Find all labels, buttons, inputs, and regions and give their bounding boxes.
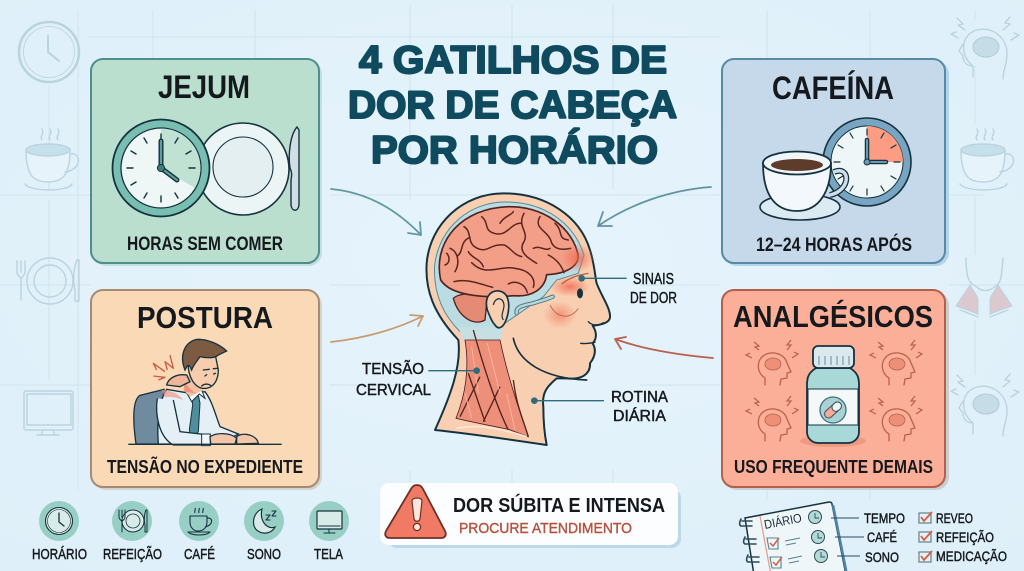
panel: postura <box>91 290 322 490</box>
diary clock hands <box>815 513 825 557</box>
neck fluid layer <box>458 327 503 342</box>
icon: medicine bottle <box>800 346 866 447</box>
notebook: diario <box>740 502 864 571</box>
label: sinais de dor: DE DOR <box>630 290 677 307</box>
icon: tela <box>309 501 349 541</box>
caption: cafeina: 12–24 HORAS APÓS <box>756 234 912 256</box>
checklist rows <box>767 538 802 568</box>
check marks <box>770 538 782 565</box>
icon: background cup <box>25 129 78 190</box>
callout line: rotina <box>531 397 604 404</box>
notebook edge <box>833 505 847 571</box>
arrow: jejum to head <box>331 189 421 235</box>
icon: background plate <box>17 258 79 304</box>
heading: jejum: JEJUM <box>158 69 250 105</box>
caption: jejum: HORAS SEM COMER <box>127 234 283 255</box>
icon: horario <box>39 501 79 541</box>
central head illustration <box>426 193 627 445</box>
check boxes <box>919 513 931 562</box>
icon: clock <box>112 120 210 216</box>
title <box>348 39 677 172</box>
label: rotina diaria <box>611 389 669 425</box>
icon: coffee cup <box>760 152 846 220</box>
eyebrow <box>562 273 588 284</box>
callout line: sinais <box>578 275 627 282</box>
label: tensao cervical <box>356 361 431 399</box>
icon: background head bottom <box>951 374 1019 436</box>
label: tensao cervical: CERVICAL <box>356 382 431 399</box>
label: rotina diaria: ROTINA <box>611 389 669 406</box>
nerve inner <box>517 297 553 313</box>
icon: clock with wedge <box>823 118 911 206</box>
callout line: cervical <box>428 367 480 374</box>
panel: jejum <box>91 59 322 266</box>
background icons <box>17 17 1019 436</box>
nostril and mouth <box>581 322 603 344</box>
title line 1: 4 GATILHOS DE <box>359 39 667 82</box>
margin line <box>760 516 771 571</box>
shoulder skin line <box>457 427 527 437</box>
forehead pain glow <box>550 277 590 297</box>
arrow: analgesicos to head <box>615 337 713 358</box>
label: sinais de dor <box>630 271 677 307</box>
warning subtext: PROCURE ATENDIMENTO <box>459 520 632 537</box>
heading: cafeina: CAFEÍNA <box>772 70 894 106</box>
icon: background neck muscles <box>956 258 1012 317</box>
neck muscles <box>456 330 528 437</box>
heading: postura: POSTURA <box>137 300 273 335</box>
icon: cafe <box>179 501 219 541</box>
label: tensao cervical: TENSÃO <box>362 361 424 378</box>
icon: background head top <box>951 17 1019 79</box>
icon: background cup right <box>960 129 1013 190</box>
ear inner <box>493 299 504 320</box>
title line 2: DOR DE CABEÇA <box>348 84 677 127</box>
icon: plate <box>197 123 289 215</box>
icon: sono <box>244 501 284 541</box>
caption: analgesicos: USO FREQUENTE DEMAIS <box>734 457 933 477</box>
checklist item: medicacao: MEDICAÇÃO <box>936 548 1007 564</box>
icon: knife <box>289 127 299 210</box>
caption: postura: TENSÃO NO EXPEDIENTE <box>107 456 303 477</box>
connector lines <box>831 518 864 556</box>
checklist <box>919 510 1007 564</box>
checklist item: reveo: REVEO <box>936 510 973 526</box>
label: sono: SONO <box>247 546 281 563</box>
warning heading: DOR SÚBITA E INTENSA <box>453 493 665 517</box>
diary labels: CAFÉ <box>867 529 897 545</box>
illustration: man at desk <box>128 339 282 446</box>
notebook page <box>745 502 846 571</box>
skull fluid layer <box>434 202 584 332</box>
label: rotina diaria: DIÁRIA <box>613 408 667 425</box>
title line 3: POR HORÁRIO <box>371 128 658 172</box>
icon: small heads <box>746 340 922 441</box>
heading: analgesicos: ANALGÉSICOS <box>733 299 933 334</box>
icon: warning triangle <box>385 485 446 538</box>
diary clocks <box>808 510 828 562</box>
icon: background monitor <box>24 391 73 435</box>
binding rings <box>740 519 759 562</box>
legend: bottom icons <box>32 501 349 563</box>
ear <box>486 291 509 328</box>
brain <box>439 207 578 297</box>
check marks <box>921 512 932 560</box>
icon: background clock <box>19 22 79 82</box>
callout: warning <box>380 483 681 548</box>
pain glow <box>562 244 595 272</box>
label: sinais de dor: SINAIS <box>633 271 674 288</box>
arrow: cafeina to head <box>598 187 711 226</box>
cheek pain glow <box>543 301 577 329</box>
jaw line <box>513 338 587 380</box>
arrow: postura to head <box>331 315 423 342</box>
label: horario: HORÁRIO <box>32 546 87 563</box>
eye <box>577 288 583 298</box>
label: cafe: CAFÉ <box>184 546 215 563</box>
cheek line <box>550 305 578 316</box>
diario label: DIÁRIO <box>763 510 803 532</box>
diary labels: TEMPO <box>864 510 905 526</box>
label: tela: TELA <box>314 546 343 563</box>
label: refeicao: REFEIÇÃO <box>103 546 162 563</box>
panel: cafeina <box>722 59 949 266</box>
checklist item: refeicao: REFEIÇÃO <box>936 529 994 545</box>
panel: analgesicos <box>722 290 949 490</box>
cerebellum <box>453 294 487 322</box>
diary labels: SONO <box>865 549 899 565</box>
head skin <box>426 193 610 445</box>
nerve <box>517 297 553 313</box>
icon: refeicao <box>112 501 152 541</box>
diary labels <box>864 510 905 565</box>
